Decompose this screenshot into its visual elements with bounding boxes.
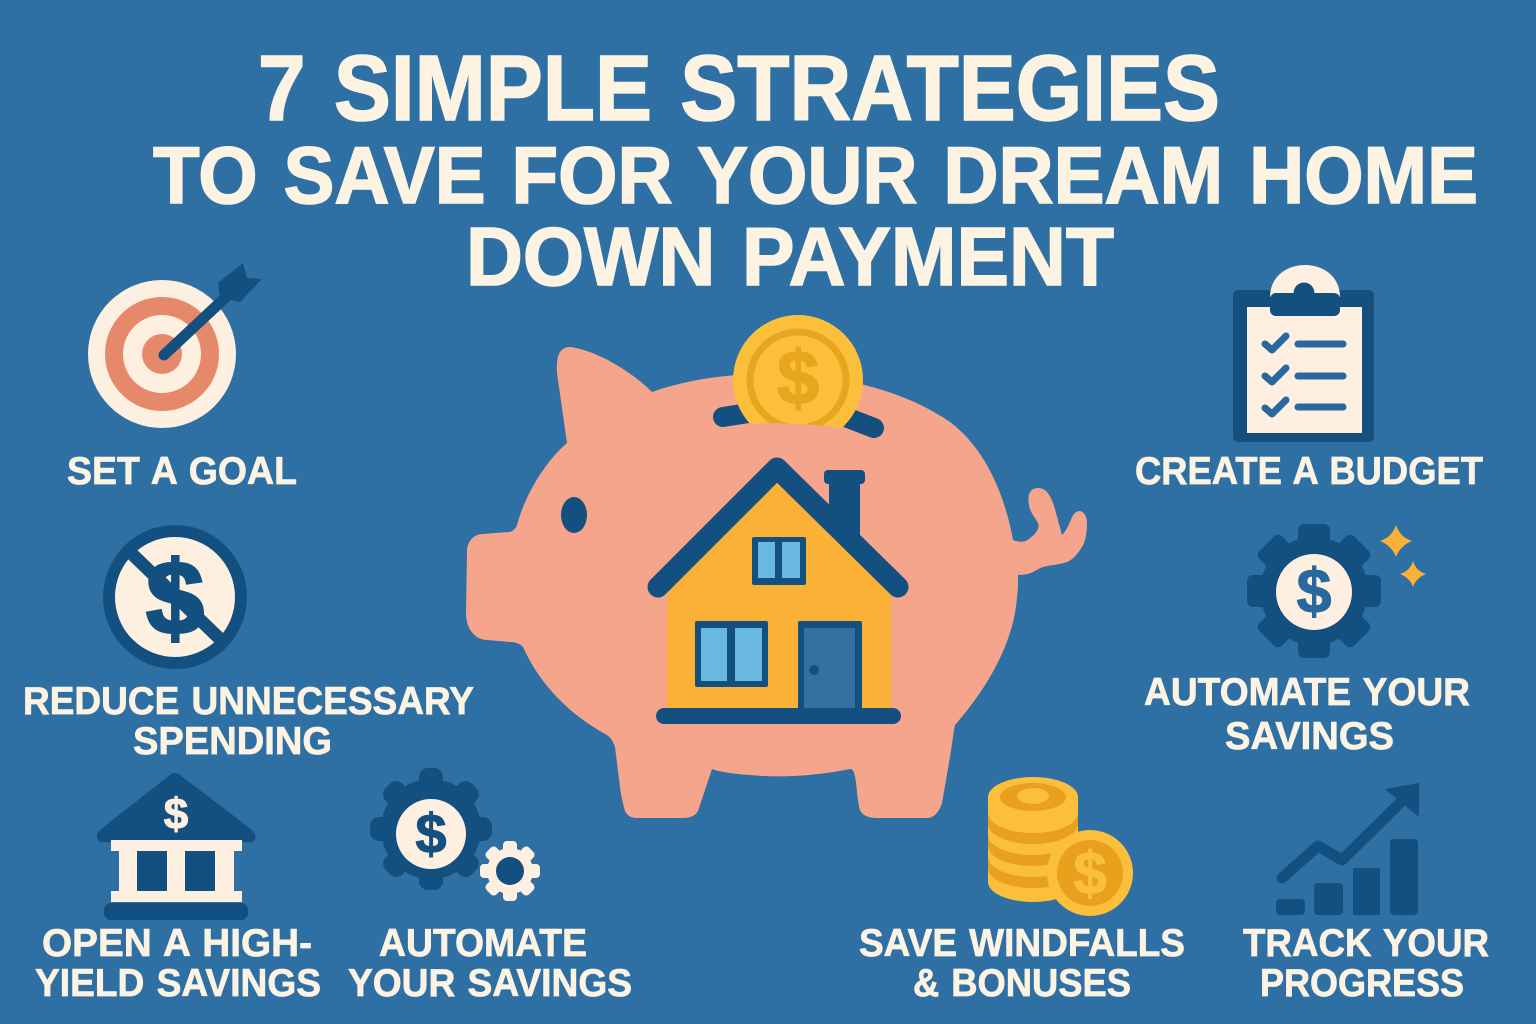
title: DOWN PAYMENT bbox=[466, 210, 1114, 303]
icon: crossed-out dollar bbox=[109, 531, 241, 663]
gold coin bbox=[733, 315, 863, 450]
icon: target with dart bbox=[88, 263, 262, 428]
label: track your progress: PROGRESS bbox=[1260, 962, 1464, 1005]
label: automate your savings bbox=[1144, 671, 1470, 758]
label: create a budget: CREATE A BUDGET bbox=[1135, 450, 1483, 493]
label: reduce unnecessary spending: SPENDING bbox=[133, 720, 332, 763]
label: reduce unnecessary spending: REDUCE UNNECESSARY bbox=[23, 680, 474, 723]
label: track your progress: TRACK YOUR bbox=[1243, 922, 1489, 965]
label: open a high-yield savings: YIELD SAVINGS bbox=[35, 962, 321, 1005]
icon: gear with dollar and sparkles: $ bbox=[1296, 557, 1332, 627]
label: save windfalls and bonuses bbox=[859, 922, 1185, 1005]
panel: track your progress bbox=[1243, 783, 1489, 1005]
label: automate your savings bbox=[348, 922, 632, 1005]
label: automate your savings: AUTOMATE bbox=[379, 922, 587, 965]
icon: gears with dollar bbox=[370, 768, 540, 901]
icon: clipboard checklist bbox=[1233, 265, 1374, 442]
title: 7 SIMPLE STRATEGIES bbox=[258, 36, 1220, 140]
label: track your progress bbox=[1243, 922, 1489, 1005]
label: reduce unnecessary spending bbox=[23, 680, 474, 763]
panel: set a goal bbox=[67, 263, 297, 493]
panel: automate your savings (lower left) bbox=[348, 768, 632, 1005]
icon: bank building bbox=[97, 773, 255, 920]
panel: reduce unnecessary spending bbox=[23, 531, 474, 763]
title: TO SAVE FOR YOUR DREAM HOME bbox=[153, 131, 1478, 221]
icon: gear with dollar and sparkles bbox=[1247, 524, 1426, 658]
title bbox=[153, 36, 1478, 303]
icon: crossed-out dollar: $ bbox=[146, 541, 204, 657]
icon: coin stack: $ bbox=[1073, 840, 1107, 907]
gold coin: $ bbox=[777, 336, 819, 421]
panel: central piggy bank bbox=[466, 315, 1087, 818]
icon: coin stack bbox=[988, 777, 1133, 916]
house bbox=[656, 468, 901, 724]
panel: automate your savings (right) bbox=[1144, 524, 1470, 758]
label: save windfalls and bonuses: & BONUSES bbox=[913, 962, 1131, 1005]
panel: create a budget bbox=[1135, 265, 1483, 493]
icon: growth chart with arrow bbox=[1276, 783, 1419, 915]
icon: bank building: $ bbox=[164, 790, 188, 839]
icon: gears with dollar: $ bbox=[415, 802, 447, 865]
label: open a high-yield savings bbox=[35, 922, 321, 1005]
label: save windfalls and bonuses: SAVE WINDFALLS bbox=[859, 922, 1185, 965]
label: automate your savings: AUTOMATE YOUR bbox=[1144, 671, 1470, 714]
panel: open a high-yield savings bbox=[35, 773, 321, 1005]
label: automate your savings: SAVINGS bbox=[1225, 715, 1394, 758]
panel: save windfalls and bonuses bbox=[859, 777, 1185, 1005]
label: automate your savings: YOUR SAVINGS bbox=[348, 962, 632, 1005]
coin slot bbox=[723, 412, 874, 428]
label: open a high-yield savings: OPEN A HIGH- bbox=[42, 922, 312, 965]
piggy eye bbox=[561, 497, 587, 533]
piggy body with tail bbox=[466, 347, 1087, 818]
label: set a goal: SET A GOAL bbox=[67, 450, 297, 493]
